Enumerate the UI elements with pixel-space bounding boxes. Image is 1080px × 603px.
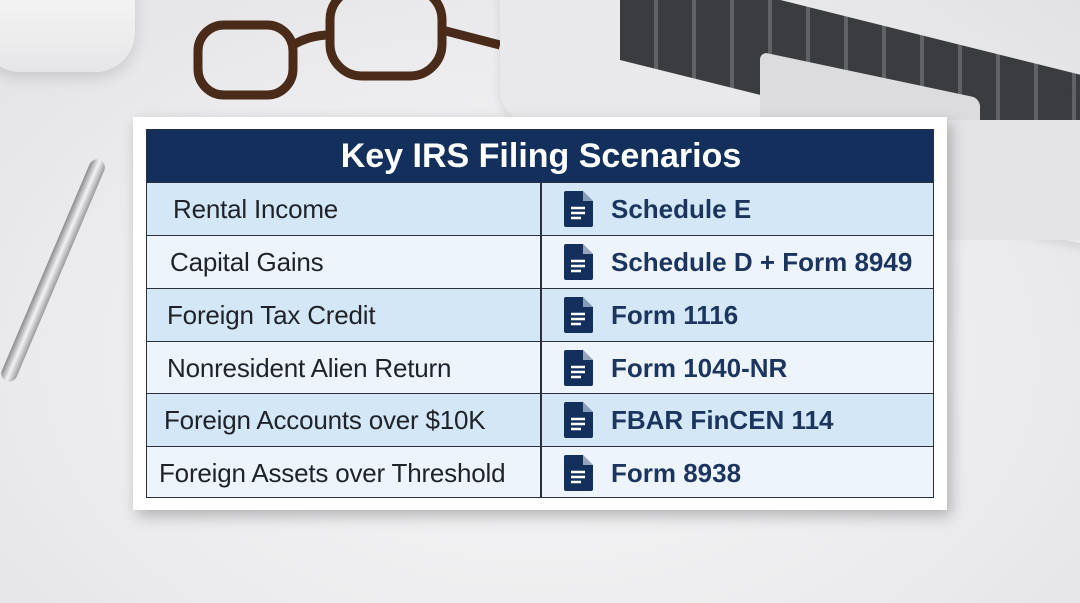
row: capital gains: Schedule D + Form 8949 xyxy=(611,247,912,277)
row: capital gains xyxy=(147,235,935,288)
row: rental income: Schedule E xyxy=(611,194,751,224)
title xyxy=(147,130,935,183)
title: Key IRS Filing Scenarios xyxy=(341,137,741,175)
row: capital gains: Capital Gains xyxy=(170,247,323,277)
pen xyxy=(0,157,107,384)
row: rental income xyxy=(147,182,935,235)
row: nonresident alien: Form 1040-NR xyxy=(611,353,787,383)
glasses xyxy=(194,0,500,100)
row: foreign tax credit: Form 1116 xyxy=(611,300,738,330)
row: foreign tax credit: Foreign Tax Credit xyxy=(167,300,375,330)
row: foreign accounts: FBAR FinCEN 114 xyxy=(611,405,834,435)
row: foreign tax credit xyxy=(147,288,935,341)
row: foreign accounts xyxy=(147,393,935,446)
row: rental income: Rental Income xyxy=(173,194,338,224)
table card xyxy=(133,117,947,510)
row: foreign assets xyxy=(147,446,935,499)
coffee cup xyxy=(0,0,135,72)
row: foreign assets: Foreign Assets over Threshold xyxy=(159,458,505,488)
row: foreign assets: Form 8938 xyxy=(611,458,741,488)
row: nonresident alien: Nonresident Alien Return xyxy=(167,353,451,383)
row: nonresident alien xyxy=(147,341,935,394)
row: foreign accounts: Foreign Accounts over $10K xyxy=(164,405,485,435)
laptop xyxy=(500,0,1080,252)
